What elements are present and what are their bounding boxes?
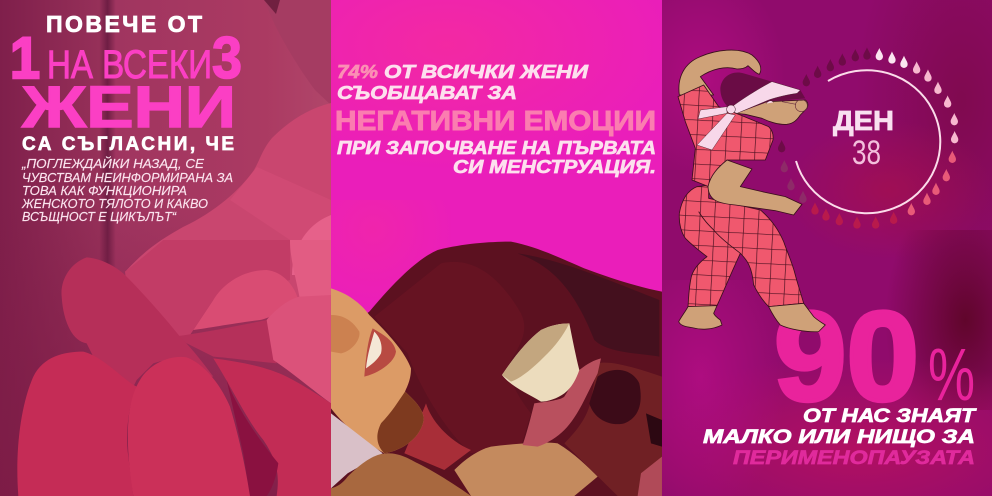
statistic: 90 percent [776, 309, 974, 404]
blanket [331, 242, 662, 496]
raised arm [679, 50, 761, 95]
statistic text: negative emotions: СИ МЕНСТРУАЦИЯ. [453, 156, 656, 177]
statistic text: perimenopause: ОТ НАС ЗНАЯТ [803, 406, 977, 427]
panel: left statistic [0, 0, 331, 496]
quote text: ЧУВСТВАМ НЕИНФОРМИРАНА ЗА [22, 171, 233, 185]
quote text: „ПОГЛЕЖДАЙКИ НАЗАД, СЕ [21, 155, 205, 171]
panel: right statistic [662, 0, 992, 496]
pyjama top [678, 85, 773, 187]
icon: cycle ring with day counter: 38 [852, 134, 881, 172]
statistic text: negative emotions: 74% [337, 61, 378, 82]
statistic text: negative emotions: ПРИ ЗАПОЧВАНЕ НА ПЪРВАТА [337, 137, 656, 158]
subheading: agree that: СА СЪГЛАСНИ, ЧЕ [22, 134, 234, 155]
heading: more than: ПОВЕЧЕ ОТ [46, 11, 202, 37]
statistic: 1 in 3 women: 1 [10, 26, 40, 91]
statistic text: perimenopause [703, 406, 977, 469]
statistic text: negative emotions: СЪОБЩАВАТ ЗА [337, 82, 517, 103]
statistic text: negative emotions [335, 61, 656, 177]
quote text: ТОВА КАК ФУНКЦИОНИРА [22, 184, 187, 198]
quote text: ВСЪЩНОСТ Е ЦИКЪЛЪТ“ [22, 210, 177, 224]
icon: ring of blood drops [778, 47, 958, 229]
statistic: 1 in 3 women: 3 [212, 25, 242, 91]
statistic text: negative emotions: НЕГАТИВНИ ЕМОЦИИ [335, 105, 656, 136]
background: magenta blobs [331, 0, 662, 313]
photo: seated woman background [0, 0, 331, 496]
statistic text: negative emotions: ОТ ВСИЧКИ ЖЕНИ [384, 61, 589, 82]
quote text: ЖЕНСКОТО ТЯЛОТО И КАКВО [21, 197, 208, 211]
statistic text: perimenopause: ПЕРИМЕНОПАУЗАТА [733, 448, 975, 469]
quote text [21, 155, 233, 224]
statistic: 90 percent: 90 [774, 285, 919, 427]
statistic text: perimenopause: МАЛКО ИЛИ НИЩО ЗА [703, 427, 975, 448]
hair [720, 72, 805, 113]
panel: middle statistic [331, 0, 662, 496]
headband [697, 82, 800, 150]
photo: smiling woman with hot water bottle [331, 242, 662, 496]
pyjama trousers [679, 185, 825, 332]
statistic: 1 in 3 women [12, 36, 241, 128]
background: purple and crimson texture [662, 0, 992, 496]
illustration: woman in pyjamas with headband [678, 50, 825, 332]
knot and glasses [727, 100, 807, 114]
statistic: 1 in 3 women: ЖЕНИ [21, 75, 236, 140]
icon: cycle ring with day counter: ДЕН [833, 105, 894, 136]
statistic: 1 in 3 women: НА ВСЕКИ [47, 43, 212, 87]
statistic: 90 percent: % [928, 333, 975, 416]
face [735, 100, 808, 124]
lower arm [708, 160, 802, 215]
hot water bottle [502, 323, 579, 402]
feet [679, 306, 722, 329]
icon: cycle ring with day counter [796, 70, 940, 213]
